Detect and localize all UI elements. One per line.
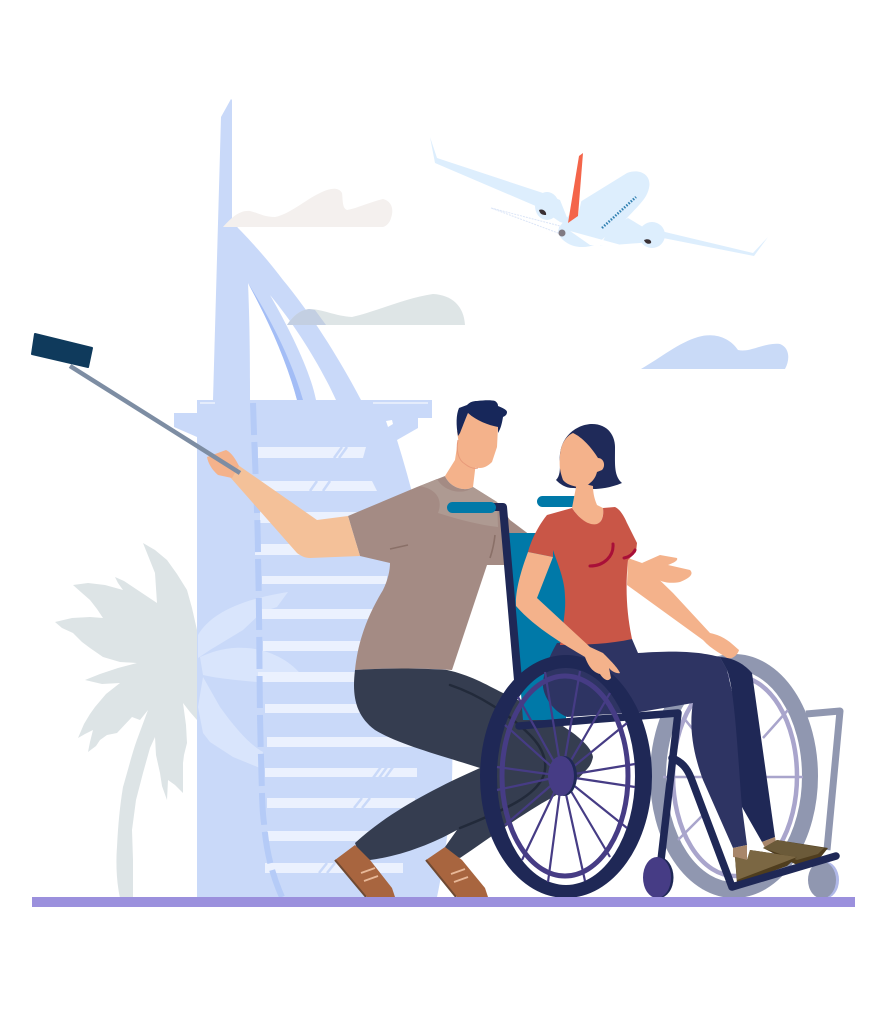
ground line: [32, 897, 855, 907]
wheelchair: handle: [447, 502, 496, 513]
inner rim: [502, 676, 628, 876]
palm leaves over tower: [198, 592, 303, 768]
man: neck and head: [445, 400, 507, 489]
woman: neck: [572, 482, 603, 525]
man: right shoe: [426, 847, 488, 897]
wheelchair: rear wheel and frame: [658, 662, 840, 898]
sail dark band: [248, 283, 303, 400]
woman: trousers: [543, 639, 748, 848]
woman: t-shirt: [528, 507, 637, 645]
man: arm and hand: [207, 450, 360, 558]
trouser seam: [450, 685, 545, 828]
woman: face: [560, 433, 604, 487]
wheelchair: caster wheel: [643, 857, 674, 898]
woman: shirt folds: [590, 544, 635, 566]
hub: [548, 756, 577, 796]
woman: [528, 424, 828, 884]
wheelchair: seat rail and fork: [519, 713, 678, 860]
woman: right arm: [627, 558, 739, 658]
man: [32, 334, 593, 897]
man: t-shirt: [348, 476, 530, 670]
tower floor stripes: [255, 447, 418, 873]
airplane: [430, 137, 768, 256]
wheelchair: front wheel: [480, 655, 652, 898]
cloud: blue: [641, 335, 788, 369]
cloud: beige: [223, 189, 392, 227]
woman: shoes: [733, 837, 828, 884]
wheel spokes: [497, 671, 635, 882]
cloud overlap with tower: [287, 309, 326, 325]
woman: far leg: [720, 657, 775, 842]
selfie stick: [70, 366, 240, 473]
woman: open hand: [642, 555, 692, 583]
wheelchair: backrest pole: [490, 507, 518, 680]
woman: hair: [556, 424, 622, 489]
plane engines: [535, 192, 559, 220]
sail window right: [270, 295, 336, 400]
man: left shoe: [335, 845, 395, 897]
man: trousers: [354, 668, 593, 860]
tyre: [480, 655, 652, 898]
wheelchair: backrest: [509, 533, 566, 720]
woman: left arm and hand: [516, 552, 620, 680]
wheelchair: handle behind woman: [537, 496, 579, 507]
palm tree: [55, 543, 197, 898]
shoe laces: [361, 868, 468, 882]
plane wings: [430, 137, 570, 225]
sail window left: [248, 283, 297, 400]
tower: Burj Al Arab: [174, 99, 452, 897]
phone: [32, 334, 92, 367]
wheelchair: footrest frame: [672, 758, 836, 887]
cloud: grey: [287, 294, 465, 325]
plane fuselage: [558, 171, 649, 247]
